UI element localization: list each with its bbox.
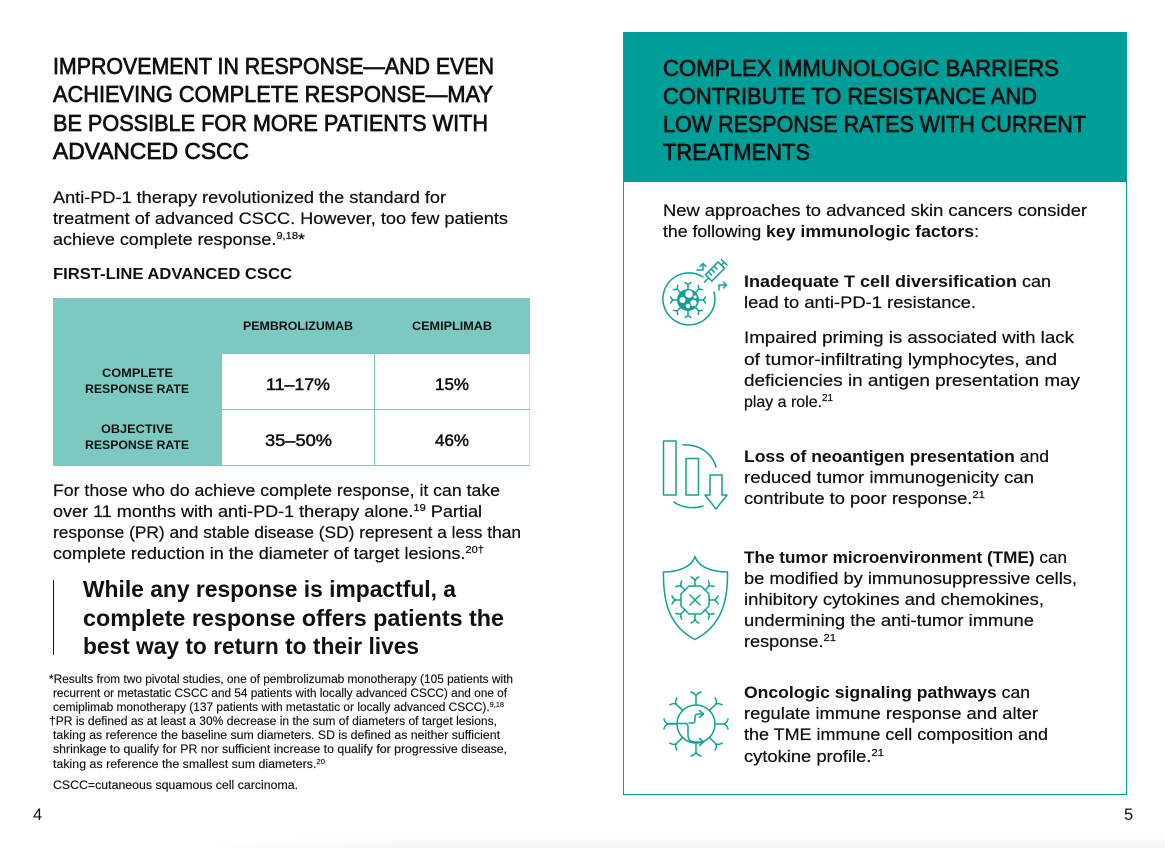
page number 4: 4	[33, 806, 42, 824]
item: T cell diversification: 21	[822, 393, 833, 404]
response rate table: 46%	[435, 432, 469, 450]
item: neoantigen presentation: reduced tumor immunogenicity can	[744, 468, 1034, 487]
left page heading: BE POSSIBLE FOR MORE PATIENTS WITH	[53, 110, 488, 136]
icon: syringe and virus cell	[663, 259, 727, 325]
item: tumor microenvironment	[744, 548, 1077, 651]
item: neoantigen presentation: 21	[972, 489, 985, 501]
item: neoantigen presentation	[744, 447, 1049, 508]
item: tumor microenvironment: be modified by immunosuppressive cells,	[744, 569, 1077, 588]
pull quote: best way to return to their lives	[83, 633, 419, 659]
intro paragraph: Anti-PD-1 therapy revolutionized the standard for	[53, 188, 446, 207]
footnotes: 20	[316, 758, 325, 766]
item: T cell diversification: lead to anti-PD-1 resistance.	[744, 293, 976, 312]
item: tumor microenvironment: undermining the anti-tumor immune	[744, 611, 1034, 630]
panel heading: CONTRIBUTE TO RESISTANCE AND	[663, 83, 1037, 109]
panel heading: COMPLEX IMMUNOLOGIC BARRIERS	[663, 55, 1059, 81]
item: oncologic signaling pathways	[744, 683, 1048, 766]
response rate table: 35–50%	[265, 432, 332, 450]
intro paragraph: *	[298, 230, 305, 249]
response explanation paragraph: Partial	[426, 502, 482, 521]
item: oncologic signaling pathways: the TME immune cell composition and	[744, 725, 1048, 744]
item: oncologic signaling pathways: 21	[871, 747, 884, 759]
item: oncologic signaling pathways: Oncologic signaling pathways can	[744, 683, 1030, 702]
item: T cell diversification	[744, 272, 1081, 411]
panel intro text: the following key immunologic factors :	[663, 222, 979, 241]
intro paragraph	[53, 188, 508, 249]
response explanation paragraph: over 11 months with anti-PD-1 therapy alone.	[53, 502, 393, 521]
intro paragraph: treatment of advanced CSCC. However, too few patients	[53, 209, 508, 228]
item: oncologic signaling pathways: cytokine profile.	[744, 747, 862, 766]
response explanation paragraph: For those who do achieve complete response, it can take	[53, 481, 500, 500]
footnotes: CSCC=cutaneous squamous cell carcinoma.	[53, 780, 298, 792]
panel header band	[623, 32, 1127, 182]
intro paragraph: achieve complete response.	[53, 230, 265, 249]
intro paragraph: 9,18	[276, 230, 298, 242]
footnotes	[49, 674, 513, 792]
response explanation paragraph: response (PR) and stable disease (SD) represent a less than	[53, 523, 521, 542]
item: neoantigen presentation: contribute to poor response.	[744, 489, 956, 508]
panel heading: TREATMENTS	[663, 139, 810, 165]
footnotes: 9,18	[490, 701, 504, 709]
footnotes: shrinkage to qualify for PR nor sufficient increase to qualify for progressive disease,	[53, 744, 507, 756]
item: tumor microenvironment: response.	[744, 632, 819, 651]
footnotes: cemiplimab monotherapy (137 patients with metastatic or locally advanced CSCC).	[53, 702, 475, 714]
icon: cell with signaling pathways	[664, 692, 728, 756]
response explanation paragraph	[53, 481, 521, 563]
panel: immunologic barriers	[623, 32, 1127, 794]
panel heading	[663, 55, 1086, 165]
table heading: FIRST-LINE ADVANCED CSCC	[53, 266, 292, 283]
response rate table	[53, 298, 530, 466]
item: neoantigen presentation: Loss of neoantigen presentation and	[744, 447, 1049, 466]
response rate table: RESPONSE RATE	[85, 438, 189, 452]
item: T cell diversification: Impaired priming is associated with lack	[744, 328, 1075, 347]
footnotes: taking as reference the smallest sum diameters.	[53, 759, 297, 771]
response rate table: 15%	[435, 376, 469, 394]
response rate table: PEMBROLIZUMAB	[243, 319, 353, 333]
left page heading: ACHIEVING COMPLETE RESPONSE—MAY	[53, 81, 493, 107]
item: tumor microenvironment: The tumor microenvironment (TME) can	[744, 548, 1067, 567]
response explanation paragraph: 20†	[465, 544, 484, 556]
response rate table: COMPLETE	[102, 366, 173, 380]
response explanation paragraph: complete reduction in the diameter of target lesions.	[53, 544, 443, 563]
left page heading: ADVANCED CSCC	[53, 138, 249, 164]
response rate table: 11–17%	[266, 376, 330, 394]
item: oncologic signaling pathways: regulate immune response and alter	[744, 704, 1038, 723]
left page heading: IMPROVEMENT IN RESPONSE—AND EVEN	[53, 53, 494, 79]
pull quote: complete response offers patients the	[83, 605, 504, 631]
response rate table: CEMIPLIMAB	[412, 319, 492, 333]
response explanation paragraph: 19	[413, 502, 426, 514]
footnotes: recurrent or metastatic CSCC and 54 patients with locally advanced CSCC) and one of	[53, 688, 508, 700]
item: tumor microenvironment: inhibitory cytokines and chemokines,	[744, 590, 1044, 609]
item: T cell diversification: Inadequate T cell diversification can	[744, 272, 1051, 291]
panel heading: LOW RESPONSE RATES WITH CURRENT	[663, 111, 1086, 137]
item: T cell diversification: of tumor-infiltrating lymphocytes, and	[744, 350, 1057, 369]
response rate table: OBJECTIVE	[101, 422, 173, 436]
left page heading	[53, 53, 494, 164]
item: T cell diversification: deficiencies in antigen presentation may	[744, 371, 1081, 390]
item: tumor microenvironment: 21	[824, 632, 836, 644]
panel intro text: New approaches to advanced skin cancers consider	[663, 201, 1087, 220]
icon: shield with cell	[663, 556, 728, 640]
footnotes: *Results from two pivotal studies, one of pembrolizumab monotherapy (105 patients with	[49, 674, 513, 686]
panel intro text	[663, 201, 1087, 241]
icon: declining bars with down arrow	[664, 441, 727, 509]
page number 5: 5	[1124, 806, 1133, 824]
pull quote: While any response is impactful, a	[83, 576, 456, 602]
item: T cell diversification: play a role.	[744, 394, 822, 411]
response rate table: RESPONSE RATE	[85, 382, 189, 396]
footnotes: †PR is defined as at least a 30% decrease in the sum of diameters of target lesions,	[49, 716, 497, 728]
footnotes: taking as reference the baseline sum diameters. SD is defined as neither sufficient	[53, 730, 501, 742]
pull quote	[53, 576, 504, 659]
